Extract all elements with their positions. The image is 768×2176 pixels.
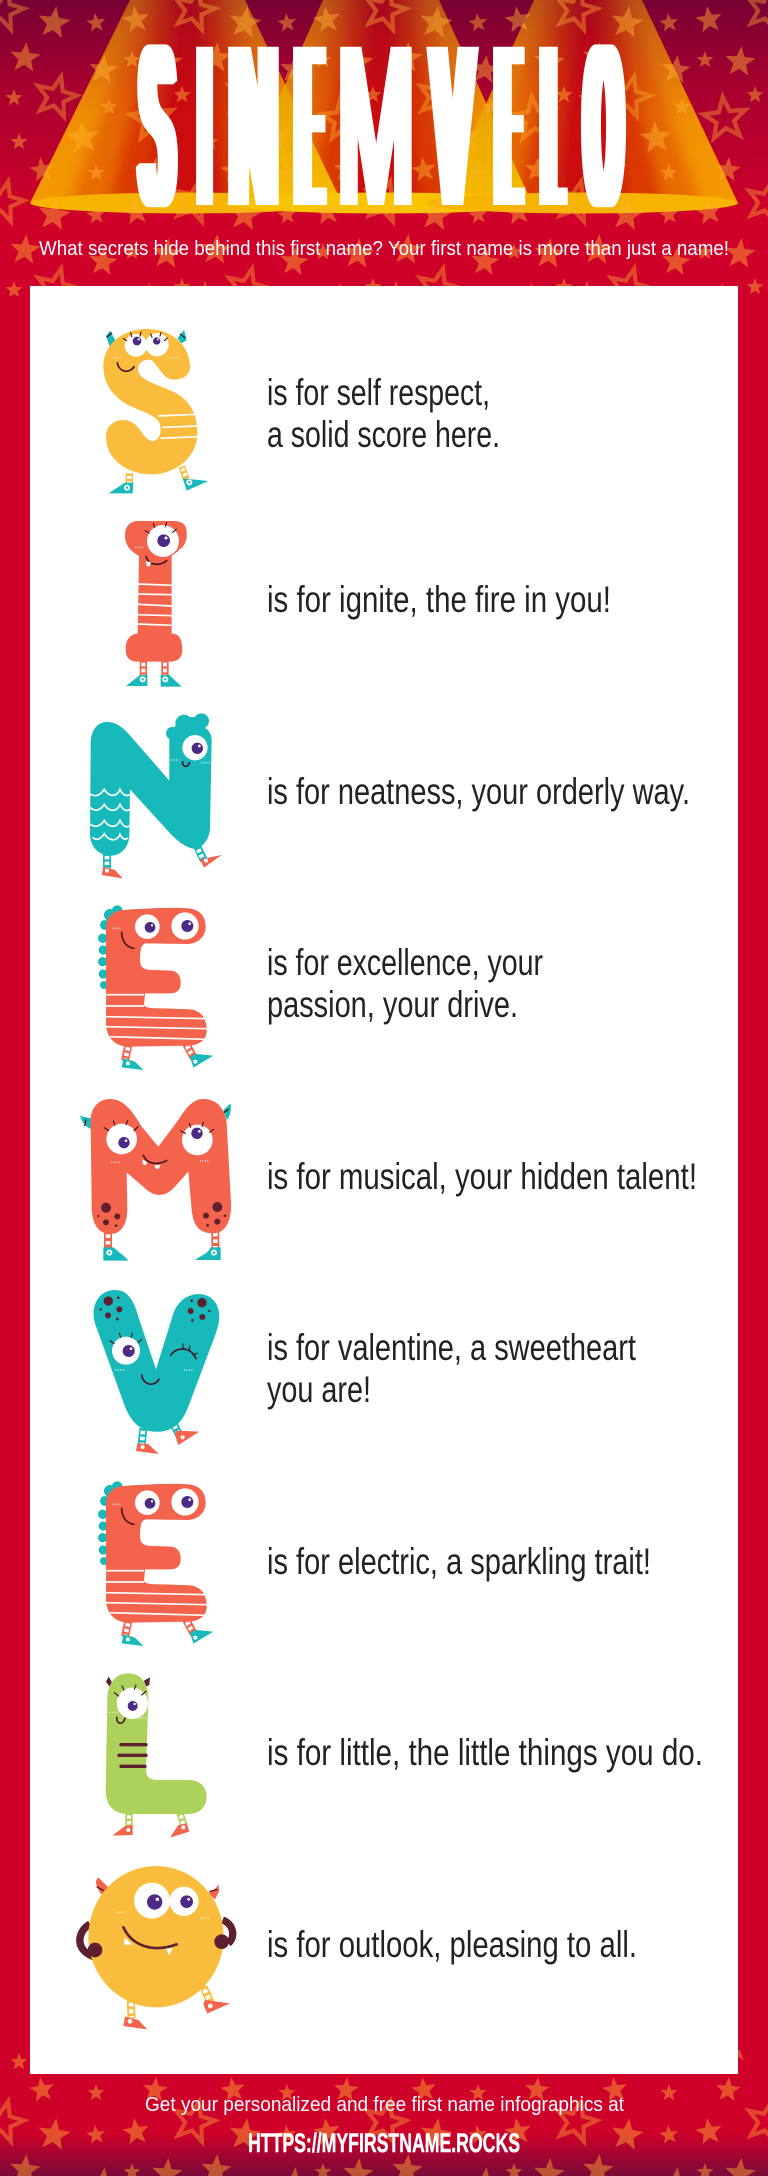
- row: O text: is for outlook, pleasing to all.: [267, 1924, 637, 1965]
- footer url: HTTPS://MYFIRSTNAME.ROCKS: [248, 2128, 520, 2158]
- title: E: [499, 0, 519, 254]
- row: S text: is for self respect,: [267, 372, 490, 413]
- row: second E text: is for electric, a sparkling trait!: [267, 1541, 651, 1582]
- row: V text: [267, 1327, 637, 1410]
- stage spotlights: [0, 0, 768, 203]
- row: E text: passion, your drive.: [267, 984, 518, 1025]
- footer line: Get your personalized and free first name infographics at: [145, 2094, 624, 2116]
- row: S text: [267, 372, 500, 455]
- row: E monster: [98, 905, 213, 1070]
- star pattern: top: [0, 0, 768, 296]
- title: N: [231, 0, 276, 254]
- star pattern: bottom: [0, 2050, 768, 2176]
- subtitle: What secrets hide behind this first name? Your first name is more than just a name!: [39, 238, 729, 260]
- row: E text: [267, 942, 543, 1025]
- title: I: [203, 0, 206, 254]
- title: [142, 0, 620, 255]
- row: V text: you are!: [267, 1369, 371, 1410]
- row: V text: is for valentine, a sweetheart: [267, 1327, 637, 1368]
- title: V: [434, 0, 471, 254]
- title: E: [298, 0, 321, 254]
- row: L monster: [106, 1673, 207, 1838]
- row: second E monster: [98, 1481, 213, 1646]
- spotlight floor: [30, 192, 738, 214]
- row: S monster: [103, 329, 208, 493]
- row: O monster: [80, 1866, 233, 2029]
- title: M: [338, 0, 414, 255]
- row: V monster: [94, 1290, 219, 1454]
- row: S text: a solid score here.: [267, 414, 500, 455]
- row: E text: is for excellence, your: [267, 942, 543, 983]
- title: L: [545, 0, 561, 254]
- row: I monster: [125, 521, 187, 687]
- title: S: [142, 0, 172, 255]
- row: M monster: [80, 1099, 231, 1261]
- title: O: [587, 0, 620, 255]
- spotlight overlaps: [232, 84, 532, 203]
- row: I text: is for ignite, the fire in you!: [267, 579, 611, 620]
- white panel: [30, 286, 738, 2074]
- row: N monster: [90, 713, 222, 878]
